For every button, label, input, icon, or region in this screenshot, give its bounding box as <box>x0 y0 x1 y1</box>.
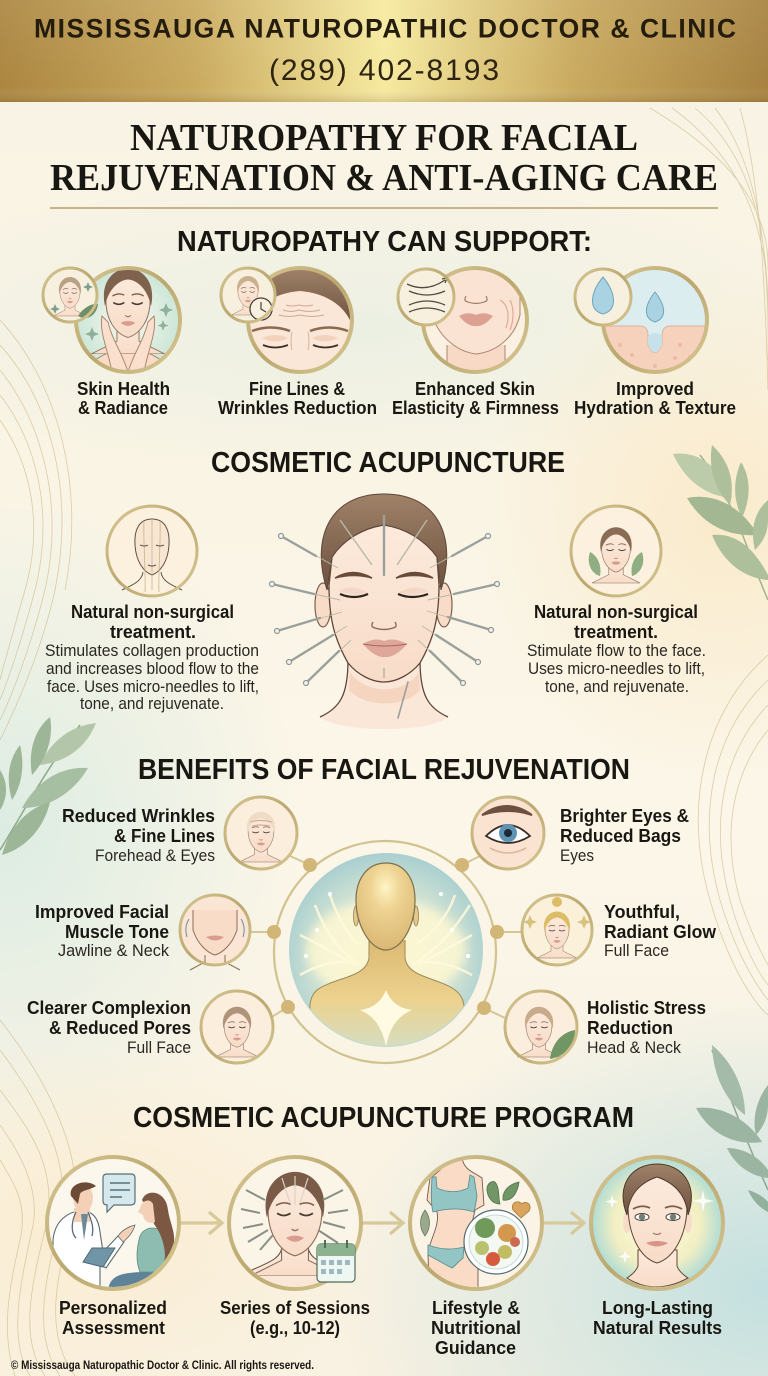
icon: clearer complexion <box>201 991 273 1063</box>
panel: program steps <box>47 1155 723 1358</box>
label: fine lines and wrinkles reduction: Wrinkles Reduction <box>218 397 377 418</box>
text: reduced wrinkles <box>62 805 215 865</box>
arrow: step 3 to 4 <box>543 1212 584 1234</box>
text: stress reduction: Head & Neck <box>587 1039 682 1057</box>
title: NATUROPATHY FOR FACIAL <box>130 117 638 159</box>
icon: skin elasticity and firmness <box>398 265 527 375</box>
text: left acupuncture description: face. Uses micro-needles to lift, <box>47 678 259 696</box>
label: enhanced skin elasticity and firmness: Enhanced Skin <box>415 378 535 399</box>
text: right acupuncture description: treatment. <box>574 621 658 642</box>
icon: personalized assessment <box>47 1157 179 1290</box>
icon: fine lines and wrinkles <box>221 268 352 372</box>
icon: radiant glow <box>522 895 592 965</box>
clinic name: MISSISSAUGA NATUROPATHIC DOCTOR & CLINIC <box>34 14 736 44</box>
text: reduced wrinkles: Reduced Wrinkles <box>62 805 215 826</box>
text: left acupuncture description <box>45 601 259 713</box>
text: left acupuncture description: and increases blood flow to the <box>46 660 259 678</box>
phone number: (289) 402-8193 <box>269 54 499 87</box>
label: improved hydration and texture <box>574 378 736 418</box>
title: REJUVENATION & ANTI-AGING CARE <box>50 157 718 199</box>
text: right acupuncture description: Uses micro-needles to lift, <box>528 660 705 678</box>
panel: cosmetic acupuncture <box>45 494 706 729</box>
text: right acupuncture description: Stimulate flow to the face. <box>527 642 706 660</box>
text: right acupuncture description <box>527 601 706 696</box>
label: series of sessions: (e.g., 10-12) <box>250 1317 340 1338</box>
label: skin health and radiance: & Radiance <box>78 397 168 418</box>
central face with needles <box>270 494 500 729</box>
label: improved hydration and texture: Improved <box>616 378 694 399</box>
text: clearer complexion <box>27 997 191 1057</box>
text: clearer complexion: Clearer Complexion <box>27 997 191 1018</box>
text: radiant glow: Youthful, <box>604 901 680 922</box>
label: personalized assessment <box>59 1297 167 1338</box>
text: brighter eyes <box>560 805 689 865</box>
icon: series of sessions <box>229 1157 361 1290</box>
icon: muscle tone <box>180 895 250 970</box>
label: personalized assessment: Assessment <box>62 1317 165 1338</box>
panel: benefits diagram <box>27 797 717 1063</box>
label: skin health and radiance <box>77 378 170 418</box>
leaves: lower right branch <box>696 1045 768 1212</box>
heading: benefits of facial rejuvenation: BENEFITS OF FACIAL REJUVENATION <box>138 754 630 786</box>
heading: cosmetic acupuncture program: COSMETIC ACUPUNCTURE PROGRAM <box>133 1102 634 1134</box>
label: lifestyle and nutritional guidance: Nutritional <box>431 1317 521 1338</box>
icon: lifestyle and nutrition <box>410 1155 542 1292</box>
label: long-lasting natural results: Long-Lasting <box>602 1297 713 1318</box>
panel: naturopathy can support <box>43 265 736 418</box>
text: stress reduction: Reduction <box>587 1017 673 1038</box>
label: fine lines and wrinkles reduction <box>218 378 377 418</box>
text: brighter eyes: Brighter Eyes & <box>560 805 689 826</box>
icon: skin health and radiance <box>43 268 180 372</box>
text: stress reduction <box>587 997 706 1057</box>
icon: brighter eyes <box>472 797 544 869</box>
text: left acupuncture description: tone, and rejuvenate. <box>80 695 224 713</box>
connector ring and nodes <box>250 841 522 1063</box>
label: skin health and radiance: Skin Health <box>77 378 170 399</box>
text: right acupuncture description: tone, and rejuvenate. <box>545 678 689 696</box>
icon: face with leaves <box>571 506 661 596</box>
heading: naturopathy can support: NATUROPATHY CAN SUPPORT: <box>177 226 592 258</box>
text: left acupuncture description: Stimulates collagen production <box>45 642 259 660</box>
text: left acupuncture description: Natural non-surgical <box>71 601 234 622</box>
heading: cosmetic acupuncture: COSMETIC ACUPUNCTURE <box>211 447 565 479</box>
arrow: step 1 to 2 <box>181 1212 222 1234</box>
patient <box>108 1272 154 1287</box>
text: improved muscle tone: Improved Facial <box>35 901 169 922</box>
central golden figure <box>289 853 483 1060</box>
text: left acupuncture description: treatment. <box>110 621 196 642</box>
text: reduced wrinkles: & Fine Lines <box>114 825 215 846</box>
label: lifestyle and nutritional guidance <box>431 1297 521 1358</box>
label: improved hydration and texture: Hydration & Texture <box>574 397 736 418</box>
text: brighter eyes: Eyes <box>560 847 594 865</box>
label: fine lines and wrinkles reduction: Fine Lines & <box>249 378 345 399</box>
closed eyes and brows <box>335 572 433 597</box>
icon: hydration and texture <box>575 268 710 375</box>
text: improved muscle tone: Muscle Tone <box>65 921 169 942</box>
text: improved muscle tone <box>35 901 170 960</box>
text: right acupuncture description: Natural non-surgical <box>534 601 698 622</box>
icon: natural results <box>591 1157 723 1289</box>
label: long-lasting natural results <box>593 1297 722 1338</box>
label: lifestyle and nutritional guidance: Lifestyle & <box>432 1297 520 1318</box>
label: series of sessions <box>220 1297 370 1338</box>
header banner <box>0 0 768 102</box>
text: stress reduction: Holistic Stress <box>587 997 706 1018</box>
text: radiant glow: Radiant Glow <box>604 921 717 942</box>
leaves: upper right branch <box>673 445 768 600</box>
text: clearer complexion: & Reduced Pores <box>49 1017 191 1038</box>
acupuncture needles <box>270 516 500 718</box>
text: improved muscle tone: Jawline & Neck <box>58 942 170 960</box>
leaves: left branch <box>0 717 96 855</box>
doctor <box>53 1210 124 1290</box>
text: reduced wrinkles: Forehead & Eyes <box>95 847 215 865</box>
text: radiant glow: Full Face <box>604 942 669 960</box>
label: lifestyle and nutritional guidance: Guidance <box>435 1337 516 1358</box>
title <box>50 117 718 199</box>
icon: holistic stress reduction <box>505 991 577 1063</box>
label: personalized assessment: Personalized <box>59 1297 167 1318</box>
label: enhanced skin elasticity and firmness <box>392 378 559 418</box>
label: enhanced skin elasticity and firmness: Elasticity & Firmness <box>392 397 559 418</box>
label: long-lasting natural results: Natural Results <box>593 1317 722 1338</box>
footer copyright: © Mississauga Naturopathic Doctor & Clinic. All rights reserved. <box>11 1360 314 1372</box>
text: clearer complexion: Full Face <box>127 1039 191 1057</box>
icon: face meridian chart <box>107 506 197 596</box>
text: radiant glow <box>604 901 717 960</box>
label: series of sessions: Series of Sessions <box>220 1297 370 1318</box>
arrow: step 2 to 3 <box>362 1212 403 1234</box>
text: brighter eyes: Reduced Bags <box>560 825 681 846</box>
icon: reduced wrinkles <box>225 797 297 869</box>
